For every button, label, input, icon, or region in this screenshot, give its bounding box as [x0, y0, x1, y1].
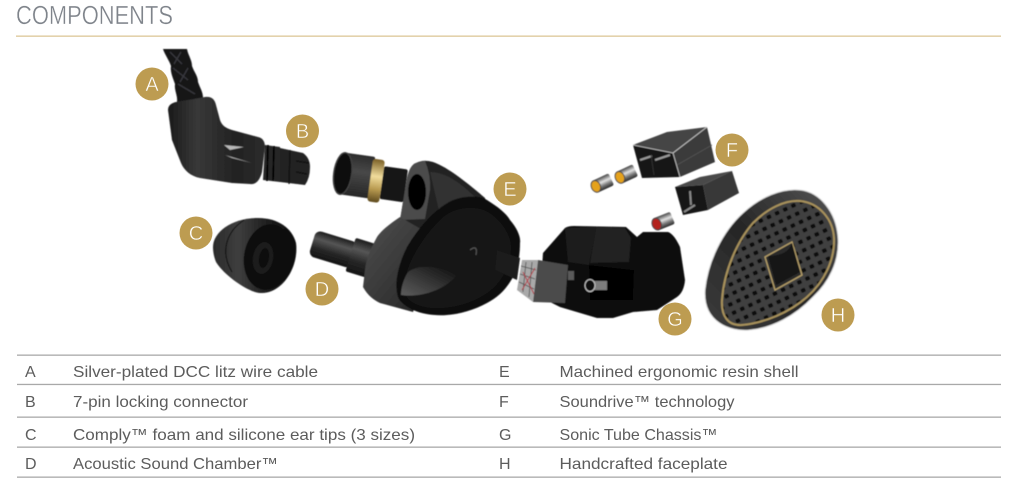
- badge B: [286, 114, 319, 148]
- badge D: [306, 272, 338, 306]
- row G: G: [499, 427, 511, 444]
- ear tip: [213, 218, 297, 294]
- badge D: D: [315, 279, 329, 301]
- title: COMPONENTS: [16, 0, 173, 30]
- exploded earphone illustration: [163, 49, 838, 330]
- row C: Comply™ foam and silicone ear tips (3 sizes): [73, 427, 415, 444]
- shell: [363, 161, 520, 315]
- row F: Soundrive™ technology: [560, 394, 734, 411]
- badge A: [136, 68, 168, 100]
- row A: A: [25, 364, 36, 381]
- row B: 7-pin locking connector: [73, 394, 249, 411]
- row H: H: [499, 456, 511, 473]
- row G: Sonic Tube Chassis™: [560, 427, 718, 444]
- badge A: A: [145, 74, 159, 96]
- row B: B: [25, 394, 36, 411]
- row C: C: [25, 427, 37, 444]
- row H: Handcrafted faceplate: [560, 456, 728, 473]
- badge G: [658, 302, 692, 336]
- badge G: G: [667, 309, 683, 331]
- row E: E: [499, 364, 510, 381]
- sonic tube chassis: [495, 226, 685, 318]
- row A: Silver-plated DCC litz wire cable: [73, 364, 318, 381]
- row F: F: [499, 394, 509, 411]
- cable connector: [168, 97, 310, 185]
- socket with gold ring: [330, 151, 409, 206]
- badge F: [716, 134, 748, 166]
- legend table: [17, 354, 1001, 478]
- row D: Acoustic Sound Chamber™: [73, 456, 278, 473]
- faceplate: [705, 190, 838, 330]
- badge C: [180, 216, 212, 250]
- badge C: C: [189, 223, 203, 245]
- badge H: [822, 298, 854, 332]
- row D: D: [25, 456, 37, 473]
- badge F: F: [726, 140, 738, 162]
- title rule: [16, 36, 1001, 37]
- row E: Machined ergonomic resin shell: [560, 364, 798, 381]
- row H: [499, 456, 728, 473]
- sound chamber tube: [307, 226, 386, 281]
- badge H: H: [831, 305, 845, 327]
- badge B: B: [296, 121, 309, 143]
- cable: [163, 49, 203, 102]
- badge E: E: [503, 179, 517, 201]
- soundrive drivers: [589, 127, 739, 232]
- badge E: [494, 172, 526, 206]
